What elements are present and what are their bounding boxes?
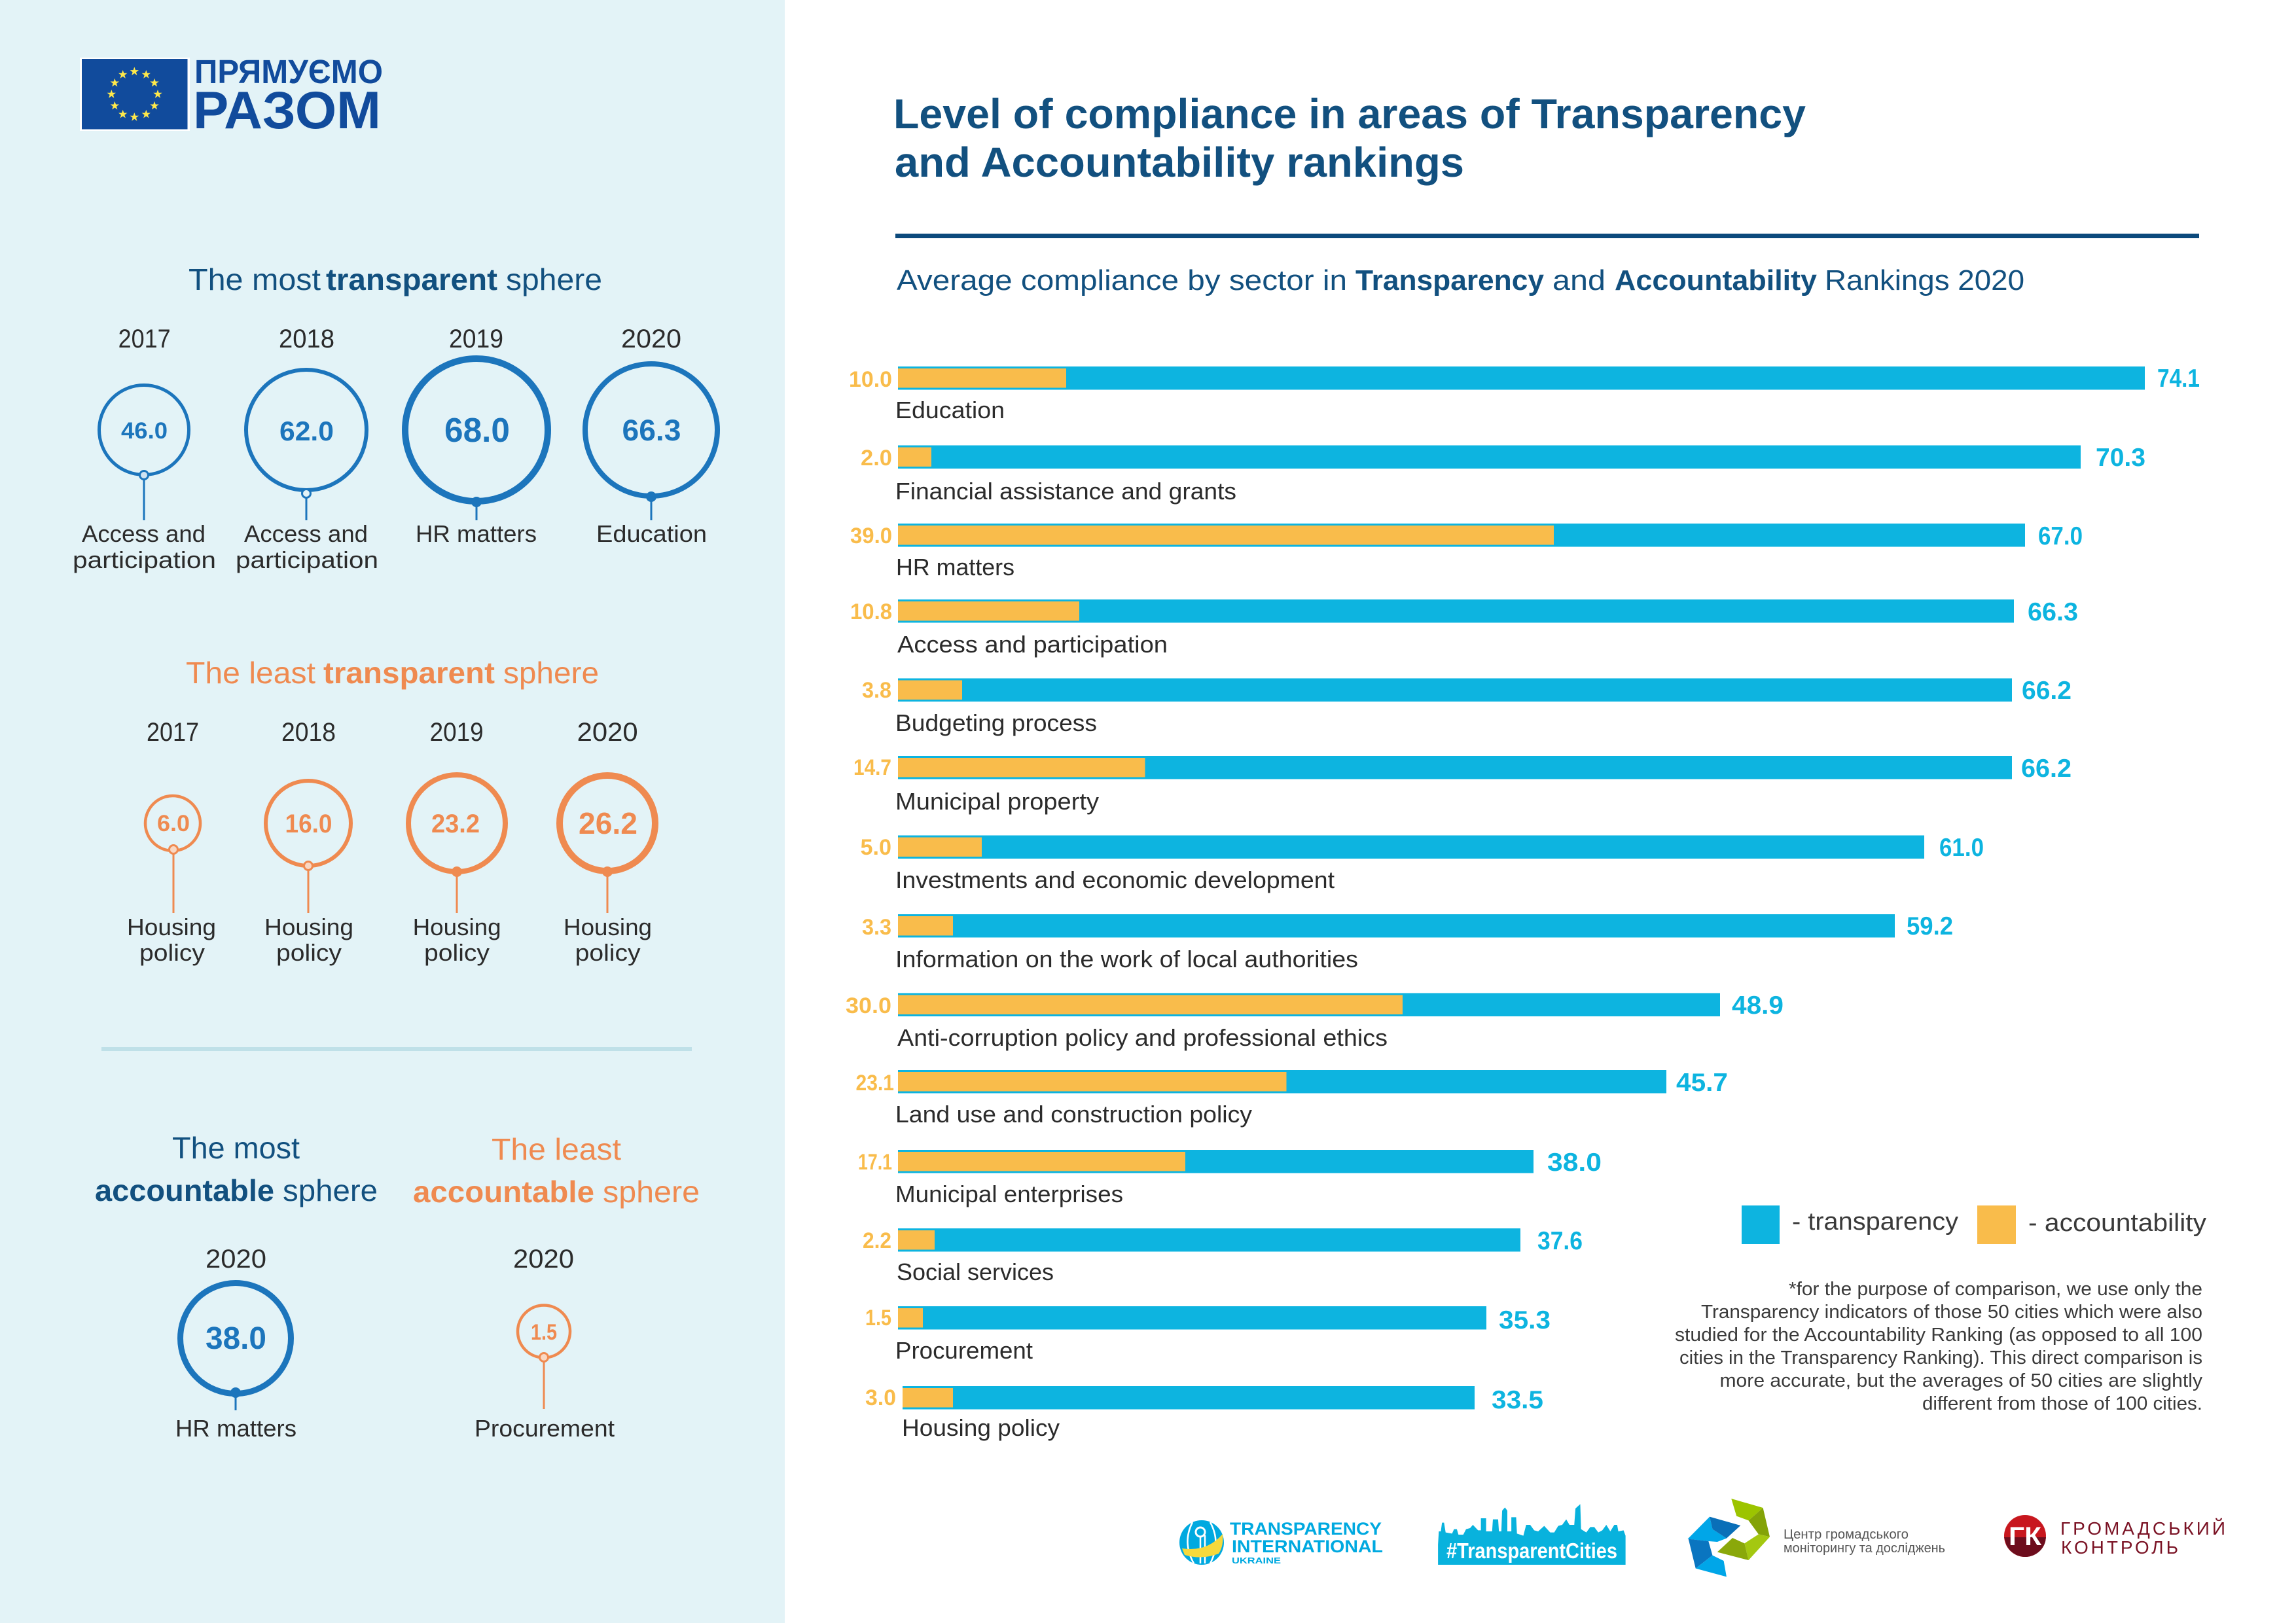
row: Budgeting process: 3.8 (862, 678, 891, 703)
heading: least accountable sphere: The least (492, 1132, 621, 1166)
row: Financial assistance and grants: 2.0 (861, 446, 892, 471)
legend (1742, 1205, 2206, 1244)
item: least transparent 2018: Housing (264, 914, 353, 940)
item: least accountable 2020: Procurement (475, 1415, 615, 1442)
item: most transparent 2017: Access and (82, 520, 206, 547)
heading: least accountable sphere: sphere (603, 1175, 700, 1209)
row: Anti-corruption policy and professional ethics: 48.9 (1732, 991, 1784, 1020)
item: least transparent 2019: Housing (413, 914, 501, 940)
row: Municipal property: 14.7 (853, 755, 891, 780)
row: HR matters: HR matters (896, 554, 1014, 580)
logo: EU Pryamuyemo Razom: РАЗОМ (193, 81, 381, 140)
heading: least accountable sphere (413, 1132, 700, 1209)
heading: most accountable sphere: The most (172, 1131, 300, 1165)
row: Information on the work of local authorities: Information on the work of local authorities (895, 946, 1358, 972)
row: Housing policy: 33.5 (1492, 1386, 1543, 1414)
footnote: cities in the Transparency Ranking). This direct comparison is (1679, 1347, 2202, 1368)
item: least transparent 2018: policy (276, 939, 342, 966)
logo: Transparency International Ukraine: TRANSPARENCY (1230, 1519, 1382, 1539)
footnote: Transparency indicators of those 50 cities which were also (1701, 1302, 2202, 1323)
logo: Hromadskyi Kontrol: ГРОМАДСЬКИЙ (2060, 1518, 2225, 1539)
footnote (1675, 1279, 2203, 1414)
item: least transparent 2020: Housing (564, 914, 652, 940)
row: Municipal enterprises: 17.1 (858, 1150, 892, 1175)
title: Level of compliance in areas of Transparency (893, 90, 1806, 137)
row: Social services (863, 1227, 1583, 1285)
row: Budgeting process: 66.2 (2022, 677, 2072, 705)
item: least transparent 2017: 6.0 (157, 811, 190, 836)
logo: #TransparentCities: #TransparentCities (1446, 1539, 1617, 1563)
item: most transparent 2017 (73, 325, 216, 573)
row: Municipal enterprises: Municipal enterprises (895, 1181, 1123, 1207)
row: Social services: 2.2 (863, 1228, 891, 1253)
item: most transparent 2018: 2018 (279, 325, 334, 353)
footnote: *for the purpose of comparison, we use only the (1789, 1279, 2202, 1300)
row: Investments and economic development: 5.0 (860, 835, 891, 860)
logo: Transparency International Ukraine: INTERNATIONAL (1232, 1537, 1383, 1556)
row: Housing policy: 3.0 (865, 1385, 896, 1410)
item: most transparent 2018: participation (236, 546, 378, 573)
row: HR matters (850, 522, 2083, 580)
item: most transparent 2020: 2020 (621, 325, 681, 353)
item: most accountable 2020: 38.0 (206, 1321, 266, 1356)
title (893, 90, 1806, 186)
bar chart (846, 365, 2200, 1441)
logo: Hromadskyi Kontrol: ГК (2009, 1522, 2042, 1551)
item: most transparent 2020: Education (596, 520, 707, 547)
row: Budgeting process: Budgeting process (895, 709, 1097, 736)
row: Land use and construction policy: 45.7 (1676, 1069, 1728, 1097)
row: Access and participation: 66.3 (2028, 598, 2078, 626)
row: Anti-corruption policy and professional ethics: Anti-corruption policy and professional ethics (897, 1024, 1388, 1051)
footnote: studied for the Accountability Ranking (as opposed to all 100 (1675, 1325, 2202, 1346)
logo: #TransparentCities (1438, 1504, 1626, 1565)
row: Access and participation (850, 598, 2078, 658)
item: least transparent 2020: 26.2 (579, 806, 637, 840)
item: least transparent 2020: policy (575, 939, 641, 966)
subtitle: Transparency (1355, 264, 1545, 296)
item: least transparent 2019: 2019 (430, 718, 484, 747)
item: most transparent 2019: 68.0 (444, 412, 510, 450)
subtitle (897, 264, 2024, 296)
item: least transparent 2018: 16.0 (285, 810, 332, 838)
heading: least transparent sphere (186, 656, 599, 690)
item: most transparent 2018: 62.0 (279, 416, 334, 446)
row: Information on the work of local authorities (862, 912, 1953, 972)
row: Land use and construction policy: Land use and construction policy (895, 1101, 1252, 1128)
row: Information on the work of local authorities: 59.2 (1907, 912, 1953, 940)
item: most transparent 2017: participation (73, 546, 216, 573)
logo: EU Pryamuyemo Razom: ПРЯМУЄМО (194, 53, 383, 90)
legend: - accountability (2028, 1209, 2206, 1237)
heading: most transparent sphere: sphere (506, 262, 602, 296)
footnote: more accurate, but the averages of 50 cities are slightly (1720, 1370, 2203, 1391)
heading: most transparent sphere (188, 262, 602, 296)
subtitle: and (1552, 264, 1605, 296)
row: Housing policy (865, 1385, 1543, 1441)
row: Municipal property (853, 755, 2072, 815)
heading: most accountable sphere: sphere (283, 1173, 378, 1207)
logo: Civil Monitoring and Research Centre (1688, 1499, 1945, 1577)
logo: Hromadskyi Kontrol: КОНТРОЛЬ (2061, 1537, 2178, 1558)
heading: least accountable sphere: accountable (413, 1175, 594, 1209)
item: most transparent 2017: 46.0 (121, 418, 168, 444)
logo: Hromadskyi Kontrol (2004, 1515, 2225, 1558)
row: Education: Education (895, 397, 1005, 423)
item: least accountable 2020: 1.5 (531, 1320, 557, 1345)
item: least accountable 2020: 2020 (513, 1245, 574, 1274)
item: most accountable 2020: 2020 (206, 1245, 266, 1274)
row: Housing policy: Housing policy (902, 1414, 1060, 1441)
item: least transparent 2017: policy (139, 939, 205, 966)
logo: Transparency International Ukraine (1179, 1519, 1383, 1565)
row: Municipal property: Municipal property (895, 788, 1099, 815)
row: Education (849, 365, 2200, 423)
item: most transparent 2019: HR matters (416, 520, 537, 547)
row: Access and participation: Access and participation (897, 631, 1168, 658)
row: Procurement: 1.5 (865, 1306, 891, 1330)
row: Land use and construction policy: 23.1 (856, 1071, 894, 1096)
item: most transparent 2018: Access and (244, 520, 368, 547)
heading: most accountable sphere (95, 1131, 378, 1207)
logo: Civil Monitoring and Research Centre: моніторингу та досліджень (1784, 1541, 1945, 1556)
subtitle: Average compliance by sector in (897, 264, 1347, 296)
subtitle: Accountability (1615, 264, 1818, 296)
title: and Accountability rankings (895, 139, 1464, 186)
item: most transparent 2018 (236, 325, 378, 573)
item: least transparent 2019 (408, 718, 505, 966)
item: most accountable 2020: HR matters (175, 1415, 296, 1442)
heading: most transparent sphere: The most (188, 262, 321, 296)
item: least transparent 2020: 2020 (577, 718, 638, 747)
item: most transparent 2019: 2019 (449, 325, 503, 353)
item: least transparent 2017 (127, 718, 216, 966)
heading: most transparent sphere: transparent (326, 262, 497, 296)
row: Financial assistance and grants (861, 444, 2145, 505)
row: Municipal property: 66.2 (2021, 755, 2072, 783)
item: least transparent 2020 (560, 718, 655, 966)
item: most transparent 2020: 66.3 (622, 414, 681, 447)
item: least accountable 2020 (475, 1245, 615, 1442)
item: least transparent 2018 (264, 718, 353, 966)
heading: least transparent sphere: The least (186, 656, 315, 690)
subtitle: Rankings 2020 (1825, 264, 2024, 296)
heading: least transparent sphere: transparent (323, 656, 495, 690)
row: HR matters: 39.0 (850, 524, 892, 548)
row: Budgeting process (862, 677, 2072, 736)
item: most transparent 2019 (405, 325, 548, 547)
row: Social services: Social services (897, 1258, 1054, 1285)
item: most transparent 2017: 2017 (118, 325, 171, 353)
row: Procurement: Procurement (895, 1337, 1033, 1364)
row: Financial assistance and grants: Financial assistance and grants (895, 478, 1236, 505)
logo: Transparency International Ukraine: UKRAINE (1232, 1556, 1281, 1565)
item: least transparent 2019: policy (424, 939, 490, 966)
row: Education: 10.0 (849, 367, 892, 392)
item: least transparent 2018: 2018 (281, 718, 336, 747)
row: Investments and economic development (860, 834, 1984, 893)
row: Land use and construction policy (856, 1069, 1728, 1128)
heading: most accountable sphere: accountable (95, 1173, 274, 1207)
heading: least transparent sphere: sphere (503, 656, 599, 690)
row: Social services: 37.6 (1537, 1227, 1583, 1255)
logo: EU Pryamuyemo Razom (80, 53, 383, 140)
item: least transparent 2017: 2017 (147, 718, 199, 747)
row: Municipal enterprises: 38.0 (1547, 1149, 1602, 1177)
row: Financial assistance and grants: 70.3 (2096, 444, 2145, 472)
logo: Civil Monitoring and Research Centre: Центр громадського (1784, 1527, 1909, 1542)
row: HR matters: 67.0 (2038, 522, 2083, 550)
row: Municipal enterprises (858, 1149, 1602, 1207)
footnote: different from those of 100 cities. (1922, 1393, 2202, 1414)
legend: - transparency (1792, 1208, 1958, 1236)
item: least transparent 2019: 23.2 (431, 810, 480, 838)
item: most transparent 2020 (585, 325, 717, 547)
row: Information on the work of local authorities: 3.3 (862, 915, 891, 940)
row: Procurement: 35.3 (1499, 1306, 1551, 1334)
row: Anti-corruption policy and professional ethics: 30.0 (846, 993, 891, 1018)
row: Access and participation: 10.8 (850, 599, 892, 624)
row: Education: 74.1 (2157, 365, 2200, 393)
item: most accountable 2020 (175, 1245, 296, 1442)
row: Anti-corruption policy and professional ethics (846, 991, 1784, 1051)
item: least transparent 2017: Housing (127, 914, 216, 940)
row: Investments and economic development: 61.0 (1939, 834, 1984, 862)
row: Procurement (865, 1306, 1551, 1364)
panel: left sidebar (0, 0, 785, 1623)
row: Investments and economic development: Investments and economic development (895, 866, 1335, 893)
